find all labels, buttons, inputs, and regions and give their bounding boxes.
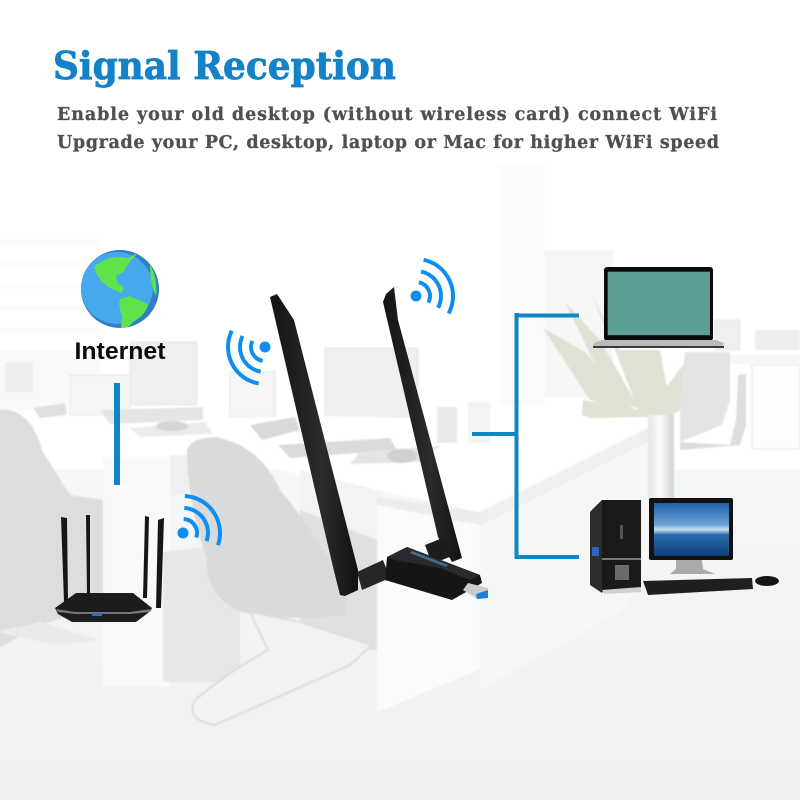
center chair — [187, 437, 346, 618]
back monitors — [70, 320, 740, 425]
icon: globe — [81, 250, 159, 328]
left chair — [0, 410, 103, 650]
title: Signal Reception — [53, 44, 396, 89]
icon: router — [55, 515, 164, 622]
router antennas — [61, 515, 164, 608]
icon: laptop — [593, 267, 724, 348]
icon: wifi signal above adapter — [410, 254, 462, 319]
subtitle text block: Upgrade your PC, desktop, laptop or Mac for higher WiFi speed — [57, 133, 719, 153]
icon: wifi signal left of adapter — [219, 324, 271, 390]
PC tower under desk — [163, 545, 240, 682]
USB plug — [463, 583, 488, 599]
plant — [543, 295, 725, 418]
keyboard — [643, 578, 753, 595]
under desk shadow — [300, 500, 380, 650]
left desk front — [103, 457, 170, 687]
right background chair — [680, 352, 730, 442]
desk surface — [40, 416, 648, 512]
right background desk — [752, 365, 800, 449]
PC tower — [590, 500, 641, 593]
router body — [55, 593, 152, 622]
USB WiFi adapter with antennas — [270, 287, 488, 600]
connector: internet to router — [114, 383, 120, 485]
label: Internet: Internet — [74, 338, 166, 365]
subtitle text block — [57, 105, 719, 153]
icon: desktop computer — [590, 498, 779, 595]
adapter body — [385, 547, 482, 600]
monitor — [649, 498, 733, 560]
subtitle text block: Enable your old desktop (without wireless card) connect WiFi — [57, 105, 717, 125]
keyboards and desk objects — [5, 362, 490, 464]
window blinds — [0, 240, 100, 333]
icon: wifi signal at router — [173, 488, 230, 553]
mouse — [755, 576, 779, 586]
front desk block — [377, 440, 648, 712]
antenna hinges — [357, 560, 390, 590]
left antenna — [270, 294, 358, 596]
connector bracket to devices — [472, 313, 579, 559]
planter pole — [648, 415, 674, 500]
center chair base — [192, 612, 372, 725]
right antenna — [383, 287, 462, 562]
